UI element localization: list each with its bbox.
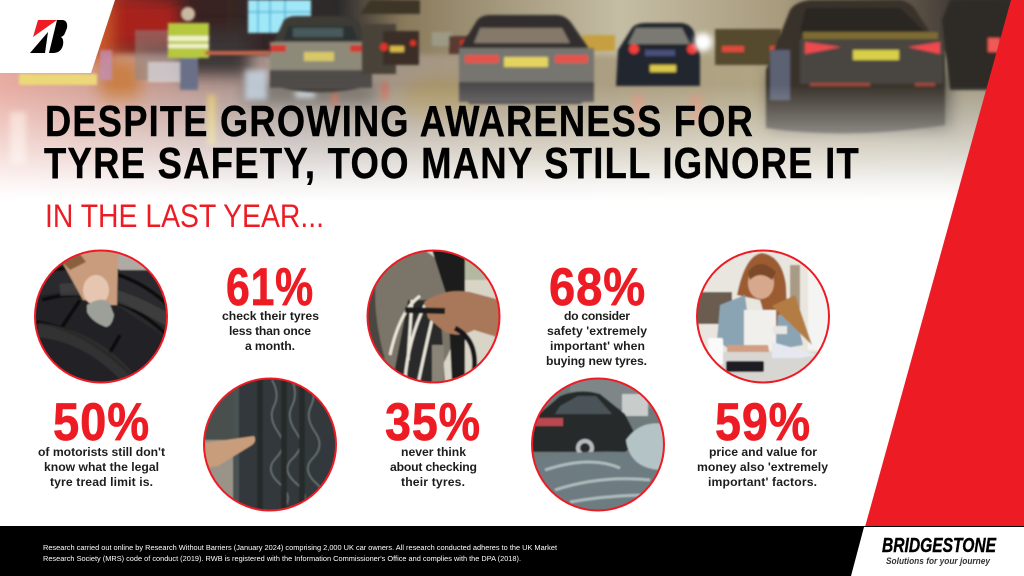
stat: 35%: 35%	[385, 393, 481, 452]
Bridgestone logo panel	[851, 527, 1024, 576]
stat: 50%: 50%	[53, 393, 150, 452]
stat: 68%	[546, 258, 647, 368]
photo: woman reviewing paperwork	[696, 250, 830, 384]
car: navy saloon	[616, 23, 700, 86]
car: grey saloon	[459, 15, 594, 104]
subheading: IN THE LAST YEAR...	[45, 198, 324, 234]
photo: hand inflating a tyre	[360, 246, 501, 386]
red diagonal band	[865, 0, 1024, 527]
stat: 50%: know what the legal	[44, 460, 159, 474]
stat: 61%: less than once	[229, 324, 311, 338]
photo: worn tyre with pointing finger	[203, 378, 337, 514]
stat: 50%	[38, 393, 165, 489]
stat: 61%: a month.	[245, 339, 295, 353]
headlight glow	[694, 33, 712, 51]
photo: coin in tyre tread	[34, 250, 170, 384]
stat: 59%: important' factors.	[708, 475, 817, 489]
research note	[43, 543, 558, 563]
Bridgestone logo panel: BRIDGESTONE	[882, 535, 997, 557]
stat: 68%: safety 'extremely	[547, 324, 647, 338]
stat: 61%	[222, 258, 319, 353]
stat: 50%: tyre tread limit is.	[50, 475, 153, 489]
research note: Research Society (MRS) code of conduct (2019). RWB is registered with the Information Commissioner's Office and complies with the DPA (2018).	[43, 554, 521, 563]
stat: 35%: their tyres.	[401, 475, 465, 489]
stat: 59%: price and value for	[709, 445, 817, 459]
stat: 61%: 61%	[226, 258, 314, 317]
stat: 68%: buying new tyres.	[546, 354, 647, 368]
stat: 35%	[385, 393, 481, 489]
stat: 35%: about checking	[390, 460, 477, 474]
research note: Research carried out online by Research Without Barriers (January 2024) comprising 2,000 UK car owners. All research conducted adheres to the UK Market	[43, 543, 558, 552]
icon: Bridgestone B mark	[30, 20, 67, 53]
stat: 68%: do consider	[564, 309, 630, 323]
title: TYRE SAFETY, TOO MANY STILL IGNORE IT	[44, 139, 860, 188]
logo panel	[0, 0, 115, 73]
stat: 35%: never think	[401, 445, 466, 459]
stat: 59%: money also 'extremely	[697, 460, 828, 474]
white fade	[0, 85, 1024, 210]
stat: 59%: 59%	[715, 393, 811, 452]
stat: 50%: of motorists still don't	[38, 445, 165, 459]
car: silver estate	[270, 16, 372, 92]
car: far right dark vehicle	[942, 0, 1001, 92]
stat: 68%: important' when	[550, 339, 645, 353]
car: large dark SUV	[766, 0, 945, 133]
stat: 68%: 68%	[549, 258, 646, 317]
title: DESPITE GROWING AWARENESS FOR	[45, 97, 754, 146]
footer bar	[0, 526, 1024, 576]
stat: 61%: check their tyres	[222, 309, 319, 323]
road reflections	[10, 70, 702, 164]
title	[44, 97, 860, 188]
stat: 59%	[697, 393, 828, 489]
cars: distant traffic	[362, 24, 781, 74]
photo: car driving through flood water	[532, 378, 666, 512]
Bridgestone logo panel: Solutions for your journey	[886, 556, 991, 567]
hero photo: cars in traffic on a wet road	[0, 0, 1011, 190]
